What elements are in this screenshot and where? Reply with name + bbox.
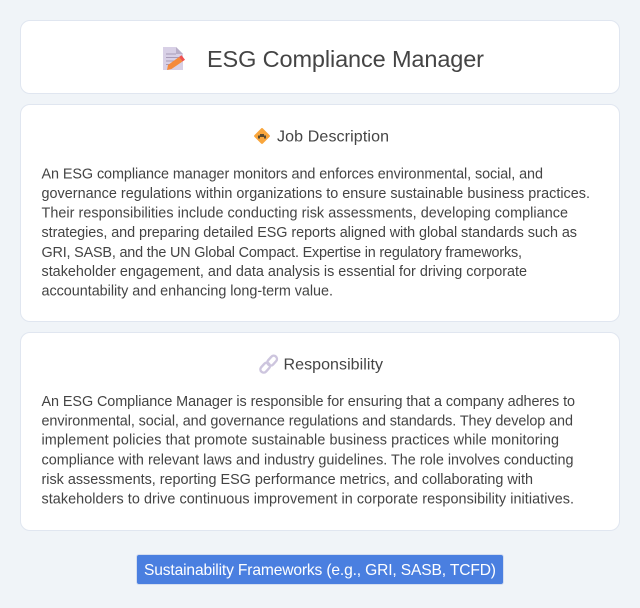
text block: job description: Their responsibilities include conducting risk assessments, developing compliance	[42, 206, 568, 222]
text block: responsibility: compliance with relevant laws and industry guidelines. The role involves conducting	[42, 452, 574, 468]
text block: responsibility: implement policies that promote sustainable business practices while monitoring	[42, 432, 559, 448]
tag: sustainability frameworks: Sustainability Frameworks (e.g., GRI, SASB, TCFD)	[144, 562, 496, 579]
text block: responsibility	[42, 394, 575, 508]
icon: chain link	[259, 354, 278, 374]
text block: responsibility: environmental, social, and governance regulations and standards. They develop and	[42, 414, 573, 430]
text block: responsibility: stakeholders to drive continuous improvement in corporate responsibility initiatives.	[42, 492, 574, 508]
text block: job description: GRI, SASB, and the UN Global Compact. Expertise in regulatory frameworks,	[42, 245, 522, 261]
panel: responsibility	[20, 332, 620, 531]
text block: responsibility: risk assessments, reporting ESG performance metrics, and collaborating with	[42, 472, 533, 488]
panel: job description	[20, 104, 620, 322]
text block: job description	[42, 166, 590, 300]
heading: responsibility: Responsibility	[284, 356, 383, 374]
heading: job description: Job Description	[277, 128, 389, 146]
title text: ESG Compliance Manager	[207, 46, 484, 72]
text block: job description: strategies, and preparing detailed ESG reports aligned with global standards such as	[42, 225, 577, 241]
tag: sustainability frameworks	[137, 555, 503, 584]
text block: job description: An ESG compliance manager monitors and enforces environmental, social, and	[42, 166, 543, 182]
text block: job description: stakeholder engagement, and data analysis is essential for driving corporate	[42, 264, 527, 280]
text block: job description: accountability and enhancing long-term value.	[42, 284, 333, 300]
panel: title	[20, 20, 620, 94]
text block: responsibility: An ESG Compliance Manager is responsible for ensuring that a company adheres to	[42, 394, 575, 410]
icon: orange diamond sign	[254, 128, 270, 144]
text block: job description: governance regulations within organizations to ensure sustainable business practices.	[42, 186, 590, 202]
icon: document with pencil	[163, 47, 185, 70]
